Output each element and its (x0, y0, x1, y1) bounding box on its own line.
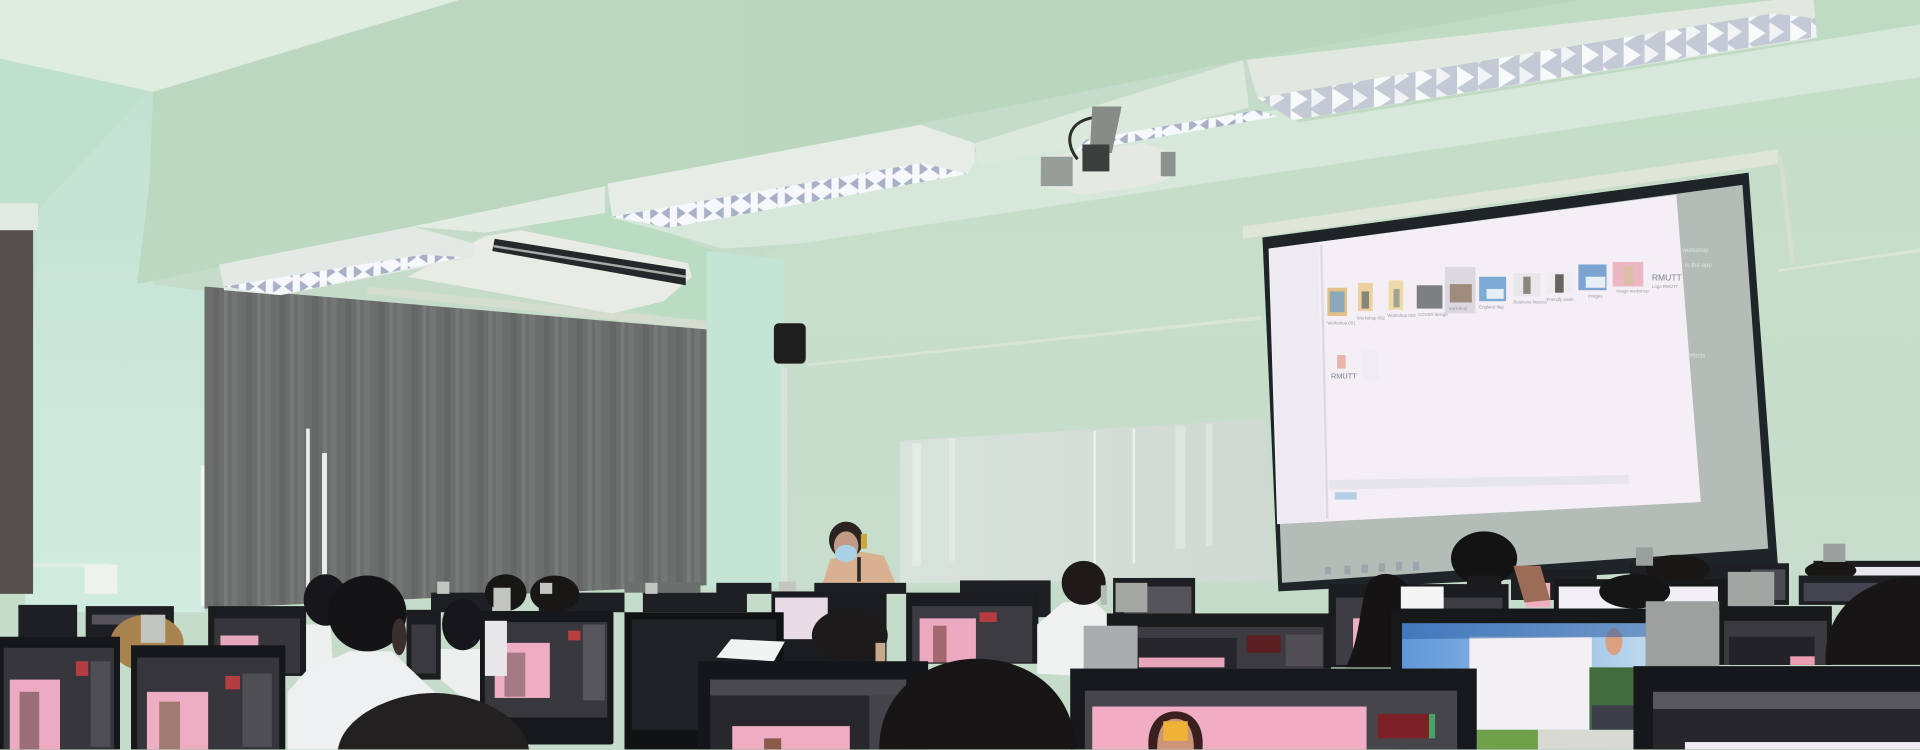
projection screen: workshop (1681, 247, 1709, 254)
file labels: COVER design (1418, 312, 1448, 317)
white ducts (413, 186, 605, 233)
paper tents (437, 544, 1845, 612)
front students (288, 576, 1920, 749)
foreground head centre (879, 659, 1075, 749)
man white shirt (1037, 600, 1107, 676)
left curtain edge (0, 203, 38, 594)
file labels: Images (1588, 294, 1603, 299)
foreground head right (1825, 577, 1920, 665)
monitor with blue desktop and explorer window (1391, 609, 1646, 749)
man in front of screen (1451, 531, 1517, 585)
student: hair over monitor (812, 609, 888, 662)
ceiling light 3 (1075, 0, 1817, 152)
taskbar (1325, 562, 1419, 574)
row 2 monitors (480, 601, 1832, 749)
pillar (707, 251, 784, 588)
screen casing (1243, 149, 1778, 239)
file labels: England flag (1479, 305, 1504, 310)
ceiling underside right (612, 0, 1920, 249)
wall rail (808, 316, 1261, 366)
whiteboard (900, 419, 1273, 583)
screen projected area (1270, 185, 1768, 583)
presenter at lectern (823, 522, 895, 583)
file thumbnails: RMUTT (1652, 272, 1683, 282)
file explorer window (1269, 195, 1701, 524)
ceiling light 2 (607, 125, 975, 228)
student: left back (306, 624, 333, 671)
student: blonde (110, 615, 184, 671)
file thumbnails (1327, 262, 1683, 380)
file labels: Logo RMUTT (1652, 284, 1679, 289)
file labels: Workshop 003 (1387, 313, 1416, 318)
projector (1040, 107, 1176, 195)
monitor large centre right (1070, 669, 1477, 749)
student background heads (485, 555, 1856, 612)
back row of monitors and students (18, 544, 1920, 639)
monitor left 2 (131, 645, 285, 749)
file labels: Workshop 002 (1357, 316, 1386, 321)
file labels (1327, 284, 1679, 325)
monitor left 1 (0, 637, 120, 749)
foreground head left (338, 693, 529, 749)
student: white shirt foreground (288, 651, 438, 749)
long hair woman (1346, 574, 1416, 667)
left wall column (24, 92, 204, 612)
row 3 monitors (208, 572, 1920, 680)
file thumbnails: RMUTT (1331, 371, 1357, 380)
student head (1599, 574, 1670, 609)
wall conduit (781, 367, 787, 582)
ceiling left (0, 0, 459, 92)
file labels: workshop (1449, 306, 1468, 311)
wall speaker (774, 323, 806, 364)
thermostat (84, 564, 118, 594)
file labels: Friendly smile (1547, 297, 1574, 302)
front row monitors (0, 637, 1920, 749)
projection screen: in the app (1685, 262, 1712, 269)
upper wall beam (137, 0, 1578, 284)
ceiling light 1 (219, 227, 475, 295)
monitor centre (698, 661, 928, 749)
far left wall upper (0, 59, 153, 207)
front wall right (765, 77, 1920, 588)
file labels: Image workshop (1616, 289, 1649, 294)
air conditioner (408, 230, 692, 313)
student: middle white shirt (441, 649, 481, 700)
panel: vertical window curtain (201, 287, 707, 609)
file labels: Business finance (1513, 300, 1547, 305)
projection screen (1243, 149, 1795, 591)
explorer window on monitor (1469, 637, 1592, 730)
gap behind ducts (520, 208, 714, 324)
screen black frame (1262, 173, 1778, 591)
projection screen: effects (1687, 353, 1705, 360)
monitor front right (1633, 666, 1920, 749)
file labels: Workshop 001 (1327, 320, 1356, 325)
upper ceiling right (1243, 0, 1920, 122)
seated students row 3 (110, 531, 1670, 700)
